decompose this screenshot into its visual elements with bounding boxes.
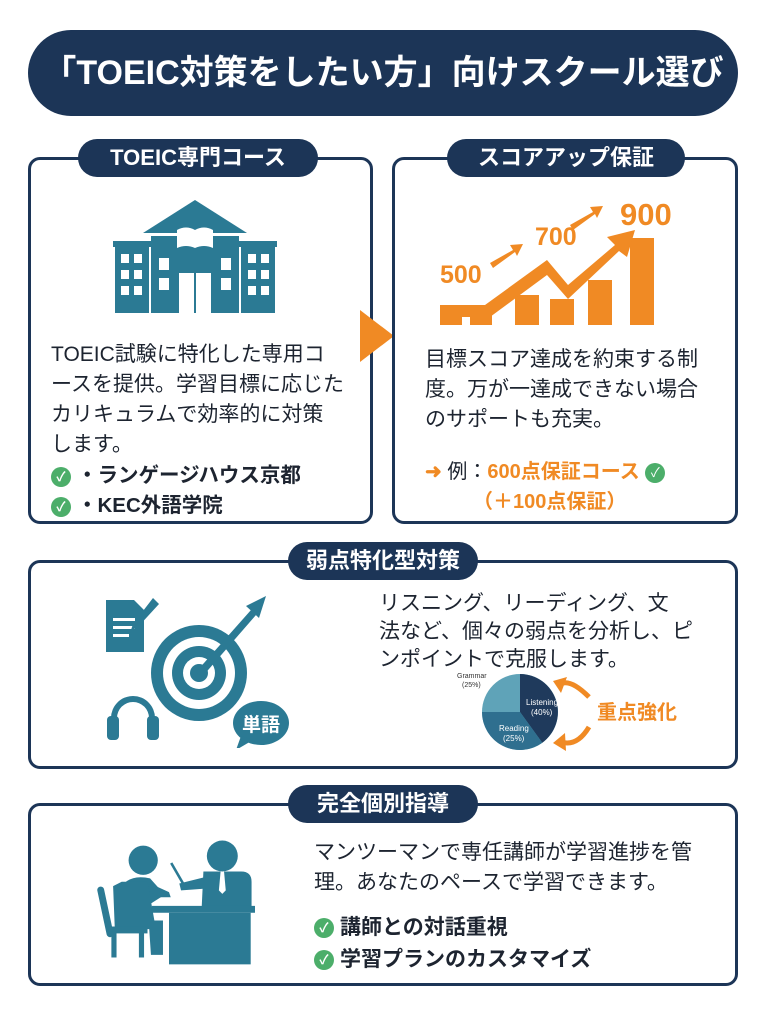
pie chart: (25%)	[462, 682, 481, 689]
arrow: between panels	[360, 310, 392, 362]
title	[28, 30, 738, 116]
heading: 完全個別指導: 完全個別指導	[317, 791, 449, 816]
text block: カリキュラムで効率的に対策	[51, 403, 323, 426]
text block: 度。万が一達成できない場合	[425, 378, 698, 401]
icons: weakness: 単語	[242, 710, 280, 737]
pie chart	[457, 673, 677, 751]
example: guarantee	[425, 460, 665, 513]
checklist: ✓	[319, 920, 329, 935]
text block: リスニング、リーディング、文	[379, 592, 669, 615]
icons: weakness	[106, 596, 289, 748]
heading: 弱点特化型対策: 弱点特化型対策	[306, 548, 460, 573]
example: guarantee: ➜ 例：600点保証コース	[425, 461, 640, 483]
pie chart: 重点強化	[597, 696, 677, 725]
chart: score growth: 500	[440, 261, 482, 289]
heading: スコアアップ保証: スコアアップ保証	[478, 145, 654, 170]
text block: 法など、個々の弱点を分析し、ピ	[379, 620, 693, 643]
pie chart: (40%)	[531, 708, 553, 717]
panel: スコアアップ保証	[392, 157, 738, 524]
checklist: ✓	[56, 499, 66, 514]
text block	[314, 841, 692, 894]
checklist: ✓	[56, 469, 66, 484]
checklist	[51, 464, 301, 517]
text block: 目標スコア達成を約束する制	[425, 348, 698, 371]
text block	[425, 348, 698, 431]
text block: ースを提供。学習目標に応じた	[51, 373, 344, 396]
text block	[379, 592, 693, 671]
text block: します。	[51, 433, 133, 456]
title: 「TOEIC対策をしたい方」向けスクール選び	[42, 54, 724, 92]
text block: マンツーマンで専任講師が学習進捗を管	[314, 841, 692, 864]
heading: TOEIC専門コース: TOEIC専門コース	[110, 145, 286, 170]
example: guarantee: ✓	[651, 465, 660, 480]
chart: score growth	[440, 197, 672, 325]
text block	[51, 343, 344, 456]
text block: TOEIC試験に特化した専用コ	[51, 343, 325, 366]
text block: のサポートも充実。	[425, 408, 614, 431]
checklist: 学習プランのカスタマイズ	[340, 948, 591, 971]
pie chart: Reading	[499, 724, 529, 733]
pie chart: (25%)	[503, 734, 525, 743]
heading: スコアアップ保証	[447, 139, 685, 177]
pie chart: Grammar	[457, 673, 487, 680]
checklist	[314, 916, 591, 971]
heading: TOEIC専門コース	[78, 139, 318, 177]
text block: ンポイントで克服します。	[379, 648, 629, 671]
heading: 完全個別指導	[288, 785, 478, 823]
pie chart: Listening	[526, 698, 558, 707]
heading: 弱点特化型対策	[288, 542, 478, 580]
checklist: ・ランゲージハウス京都	[77, 464, 301, 487]
panel: 弱点特化型対策	[28, 560, 738, 769]
chart: score growth: 900	[620, 197, 672, 232]
checklist: 講師との対話重視	[340, 916, 508, 939]
panel: 完全個別指導	[28, 803, 738, 986]
panel: TOEIC専門コース	[28, 157, 373, 524]
icon: tutor and student	[97, 840, 255, 964]
checklist: ・KEC外語学院	[77, 494, 223, 517]
checklist: ✓	[319, 952, 329, 967]
text block: 理。あなたのペースで学習できます。	[314, 871, 668, 894]
example: guarantee: （＋100点保証）	[473, 491, 626, 513]
chart: score growth: 700	[535, 223, 577, 251]
icon: school building	[113, 200, 277, 313]
